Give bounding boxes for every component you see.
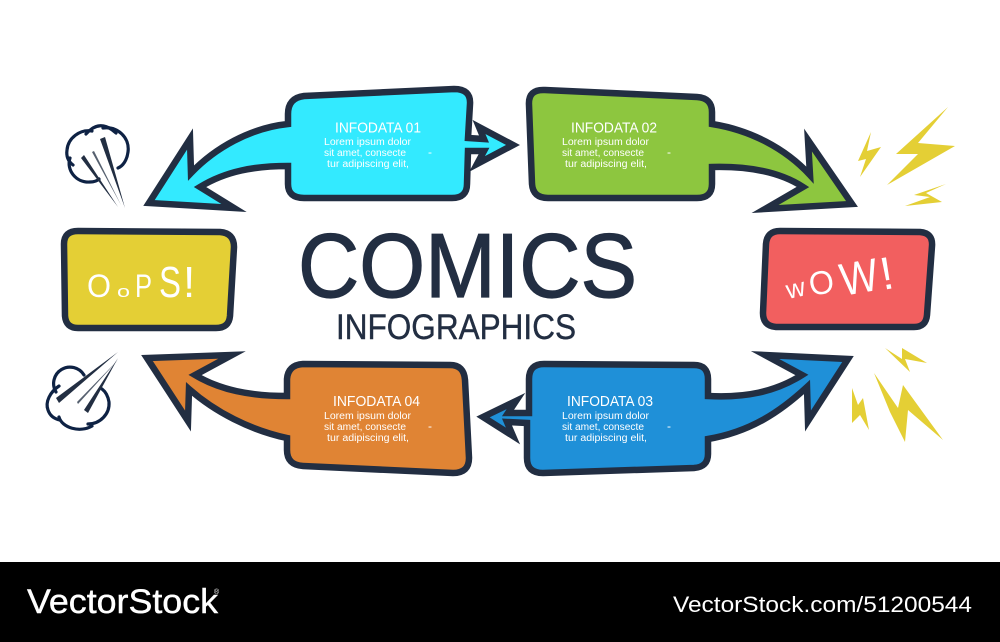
panel: oops: S xyxy=(159,258,181,307)
panel: wow: O xyxy=(806,262,837,303)
icon: smoke puff bottom xyxy=(47,352,118,429)
panel: infodata 01: tur adipiscing elit, xyxy=(327,159,409,170)
panel: infodata 01: Lorem ipsum dolor xyxy=(324,137,412,148)
panel: infodata 01: INFODATA 01 xyxy=(335,120,421,136)
panel: infodata 04: tur adipiscing elit, xyxy=(327,433,409,444)
icon: lightning top right xyxy=(858,107,955,206)
panel: wow: W xyxy=(836,248,883,306)
panel: infodata 03: INFODATA 03 xyxy=(567,394,653,410)
subtitle: INFOGRAPHICS xyxy=(336,308,576,347)
panel: wow: w xyxy=(782,272,808,305)
panel: infodata 02: sit amet, consecte xyxy=(562,148,645,159)
panel: wow: ! xyxy=(876,246,897,300)
panel: infodata 01: - xyxy=(428,145,432,159)
panel: oops: O xyxy=(87,268,111,304)
panel: infodata 02: INFODATA 02 xyxy=(571,120,657,136)
panel: infodata 03: Lorem ipsum dolor xyxy=(562,411,650,422)
icon: smoke puff top xyxy=(67,126,128,208)
panel: infodata 04: sit amet, consecte xyxy=(324,422,407,433)
panel: infodata 02: tur adipiscing elit, xyxy=(565,159,647,170)
panel: oops xyxy=(64,231,234,328)
panel: infodata 03 xyxy=(483,355,848,473)
panel: infodata 04: - xyxy=(428,419,432,433)
footer bar: VectorStock xyxy=(27,583,219,621)
panel: infodata 03: sit amet, consecte xyxy=(562,422,645,433)
title: COMICS xyxy=(298,216,637,317)
panel: infodata 02: - xyxy=(667,145,671,159)
panel: oops: ! xyxy=(183,258,195,307)
panel: infodata 04: INFODATA 04 xyxy=(333,394,420,410)
panel: infodata 03: - xyxy=(667,419,671,433)
panel: infodata 02 xyxy=(529,90,852,209)
panel: oops: o xyxy=(117,282,130,301)
panel: infodata 04: Lorem ipsum dolor xyxy=(324,411,412,422)
icon: lightning bottom right xyxy=(852,348,943,442)
panel: infodata 01: sit amet, consecte xyxy=(324,148,407,159)
panel: wow xyxy=(763,231,932,327)
panel: infodata 01 xyxy=(149,89,513,208)
panel: oops: P xyxy=(135,268,152,304)
footer bar xyxy=(0,562,1000,642)
panel: infodata 03: tur adipiscing elit, xyxy=(565,433,647,444)
footer bar: VectorStock.com/51200544 xyxy=(673,592,972,617)
panel: infodata 02: Lorem ipsum dolor xyxy=(562,137,650,148)
panel: infodata 04 xyxy=(147,355,469,473)
footer bar: ® xyxy=(214,588,220,596)
